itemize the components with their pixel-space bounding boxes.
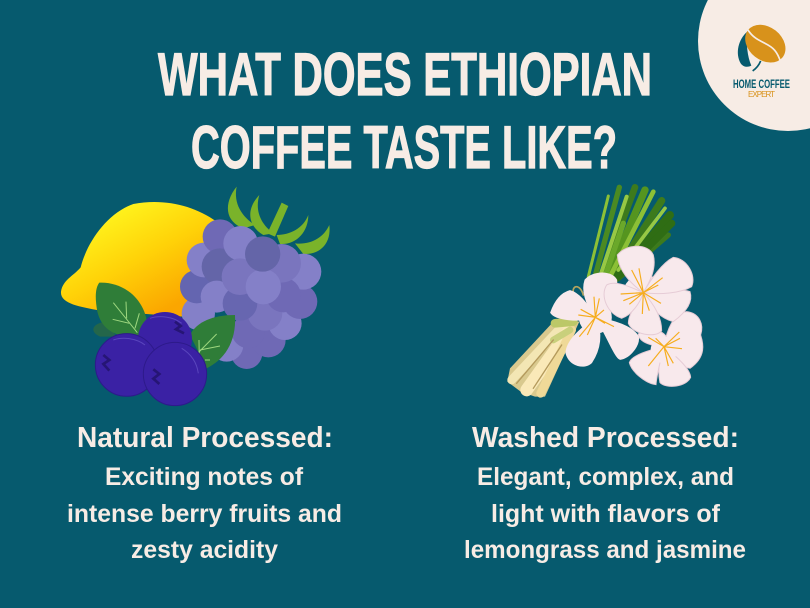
jasmine flower: upper right	[604, 246, 693, 335]
title	[158, 41, 652, 181]
jasmine flower: lower left	[551, 273, 639, 366]
heading: natural processed: Natural Processed:	[77, 422, 333, 454]
description: washed processed: lemongrass and jasmine	[464, 536, 746, 564]
illustration: lemongrass and jasmine	[507, 187, 703, 397]
heading: washed processed: Washed Processed:	[472, 422, 739, 454]
raspberry stem and sepals	[228, 187, 330, 254]
description: washed processed: light with flavors of	[491, 500, 721, 528]
blueberries	[95, 312, 207, 406]
logo text: expert: EXPERT	[748, 90, 775, 99]
right caption: washed processed	[464, 422, 746, 564]
description: natural processed	[67, 463, 342, 564]
logo badge	[698, 0, 810, 131]
description: washed processed: Elegant, complex, and	[477, 463, 734, 491]
lemon	[61, 202, 217, 317]
description: washed processed	[464, 463, 746, 564]
left caption: natural processed	[67, 422, 342, 564]
description: natural processed: Exciting notes of	[105, 463, 304, 491]
jasmine flower: lower right	[629, 312, 703, 386]
illustration: lemon, raspberry and blueberries	[61, 187, 330, 406]
description: natural processed: intense berry fruits and	[67, 500, 342, 528]
stamens	[578, 268, 682, 366]
description: natural processed: zesty acidity	[131, 536, 278, 564]
green leaves	[93, 283, 235, 368]
lemongrass stalks	[507, 187, 672, 397]
icon: coffee bean logo	[738, 17, 793, 71]
raspberry drupelets	[180, 219, 321, 369]
